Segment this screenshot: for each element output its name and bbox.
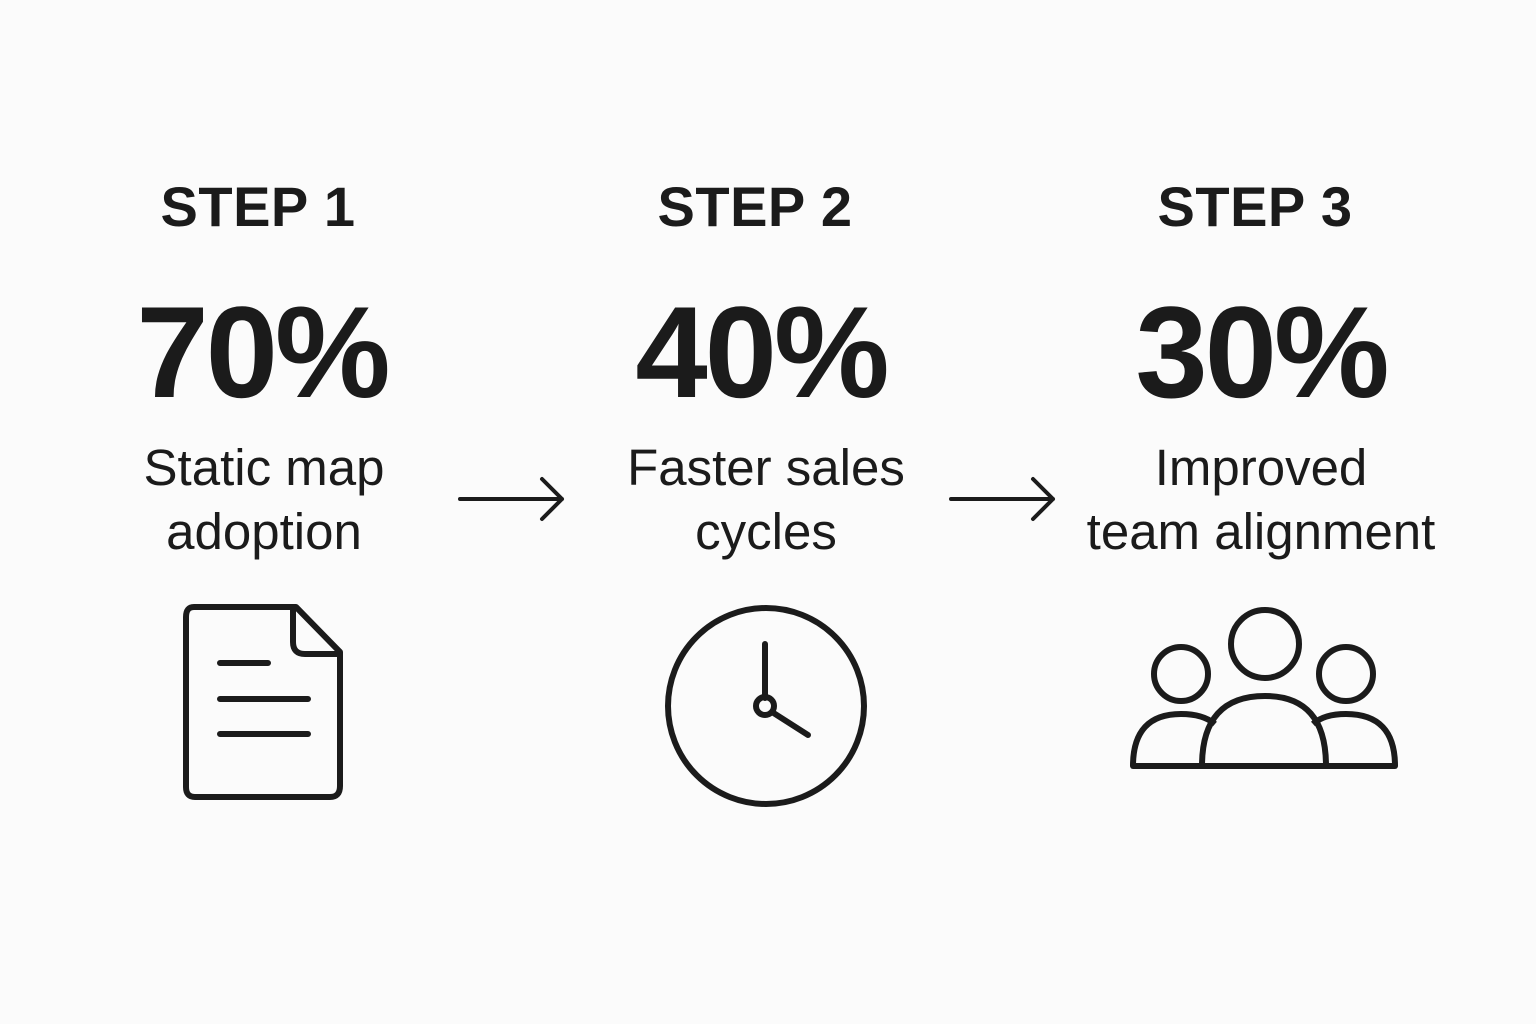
label: improved team alignment: team alignment bbox=[1087, 503, 1435, 560]
label: improved team alignment: Improved bbox=[1155, 439, 1367, 496]
heading: step 1: STEP 1 bbox=[161, 175, 355, 238]
stat: 40%: 40% bbox=[635, 279, 887, 425]
arrow: step 2 to step 3 bbox=[949, 476, 1056, 522]
column: step 1 bbox=[136, 175, 388, 560]
column: step 3 bbox=[1087, 175, 1435, 560]
heading: step 2: STEP 2 bbox=[658, 175, 852, 238]
stat: 70%: 70% bbox=[136, 279, 388, 425]
label: faster sales cycles bbox=[627, 439, 905, 560]
column: step 2 bbox=[627, 175, 905, 560]
arrow: step 1 to step 2 bbox=[458, 476, 564, 522]
label: static map adoption bbox=[144, 439, 384, 560]
heading: step 3: STEP 3 bbox=[1158, 175, 1352, 238]
label: faster sales cycles: Faster sales bbox=[627, 439, 905, 496]
icon: clock bbox=[665, 605, 867, 807]
label: static map adoption: Static map bbox=[144, 439, 384, 496]
label: improved team alignment bbox=[1087, 439, 1435, 560]
icon: document bbox=[183, 604, 343, 800]
label: faster sales cycles: cycles bbox=[695, 503, 837, 560]
stat: 30%: 30% bbox=[1135, 279, 1387, 425]
icon: team of people bbox=[1130, 607, 1398, 769]
label: static map adoption: adoption bbox=[166, 503, 362, 560]
